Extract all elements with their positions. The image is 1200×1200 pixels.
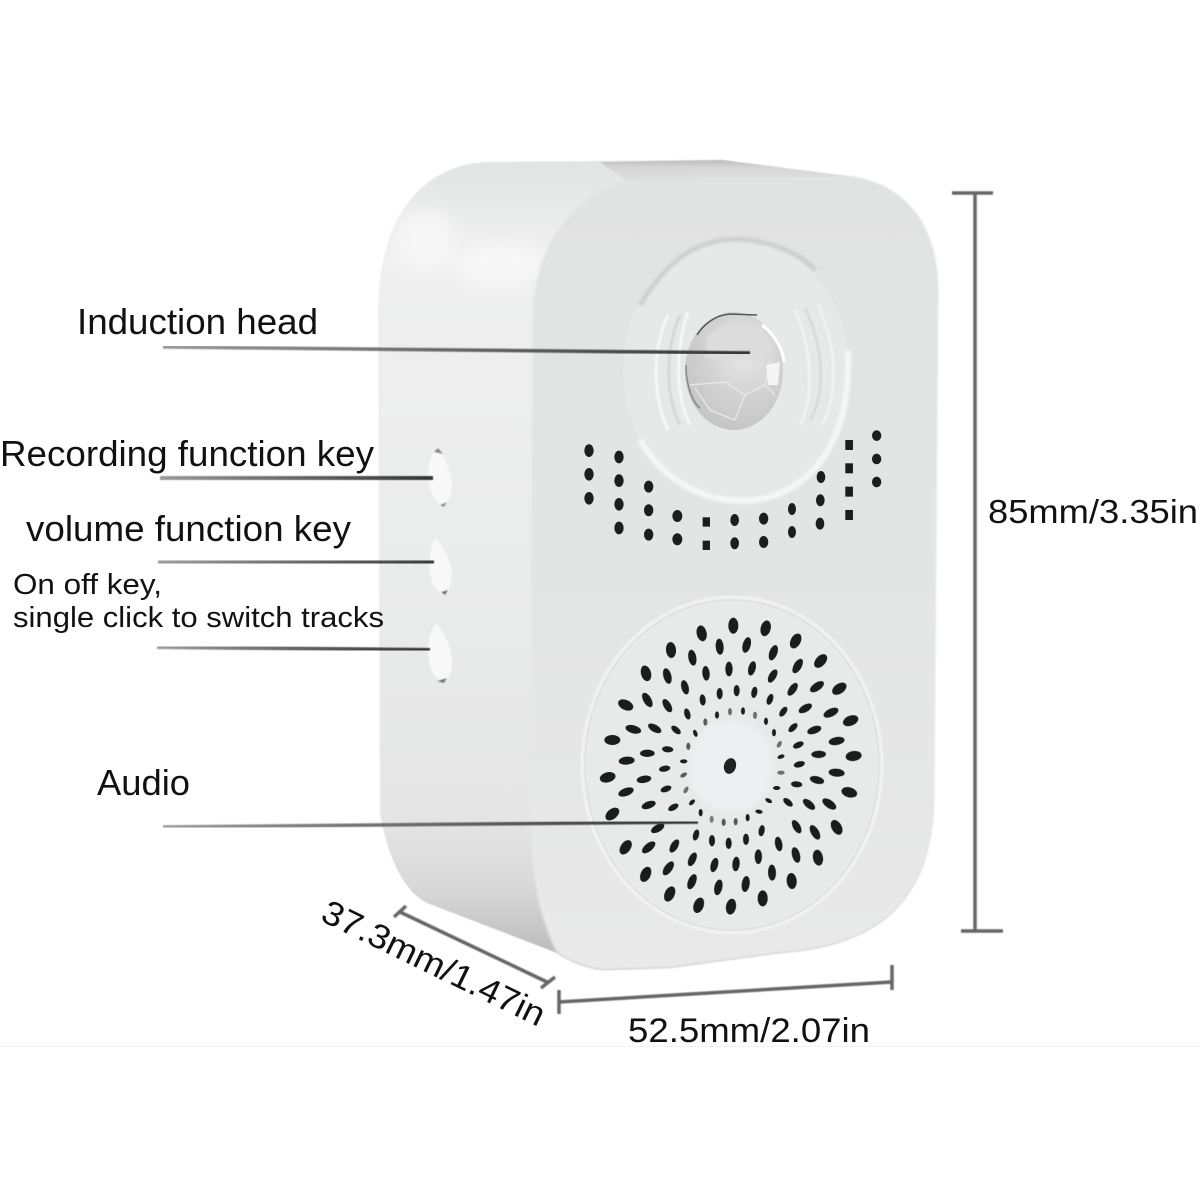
label: volume function key: volume function key [26, 508, 351, 549]
label: induction head [77, 301, 750, 353]
leader line: induction head [163, 347, 750, 353]
device side and back shell [378, 160, 938, 970]
sensor lens [685, 312, 784, 430]
label: on off key: single click to switch tracks [13, 602, 384, 634]
page background line [0, 1046, 1200, 1047]
label: recording function key: Recording function key [0, 433, 374, 474]
label: audio [97, 762, 698, 827]
leader line: recording key [160, 476, 433, 480]
panel: main speaker grille [582, 597, 882, 933]
icon: volume button [430, 538, 452, 595]
dimension: width [559, 965, 892, 1050]
label: on off key [13, 569, 430, 650]
icon: on off button [428, 624, 452, 683]
dimension: height [952, 193, 1198, 931]
ripple arcs [656, 305, 834, 430]
label: audio: Audio [97, 762, 190, 803]
leader line: audio [163, 822, 698, 827]
icon: recording button [428, 448, 452, 507]
dimension: depth: 37.3mm/1.47in [315, 893, 551, 1034]
side highlight [395, 210, 455, 270]
leader line: on off key [157, 647, 430, 650]
central hub [689, 720, 773, 812]
sensor recess halo [623, 237, 849, 503]
panel: small speaker holes row [584, 430, 881, 550]
grille disc [582, 597, 882, 933]
leader line: volume key [158, 560, 434, 564]
dimension: height: 85mm/3.35in [988, 493, 1198, 530]
label: volume function key [26, 508, 434, 564]
halo shadow crescent [640, 239, 815, 305]
product: motion sensor speaker [378, 160, 938, 970]
dimension: width: 52.5mm/2.07in [628, 1012, 870, 1050]
label: induction head: Induction head [77, 301, 318, 342]
grille holes [599, 618, 862, 915]
panel: PIR induction head [623, 237, 849, 503]
halo highlight crescent [640, 350, 848, 501]
label: on off key: On off key, [13, 569, 162, 601]
device front face [530, 176, 938, 970]
top edge strip [600, 160, 880, 190]
